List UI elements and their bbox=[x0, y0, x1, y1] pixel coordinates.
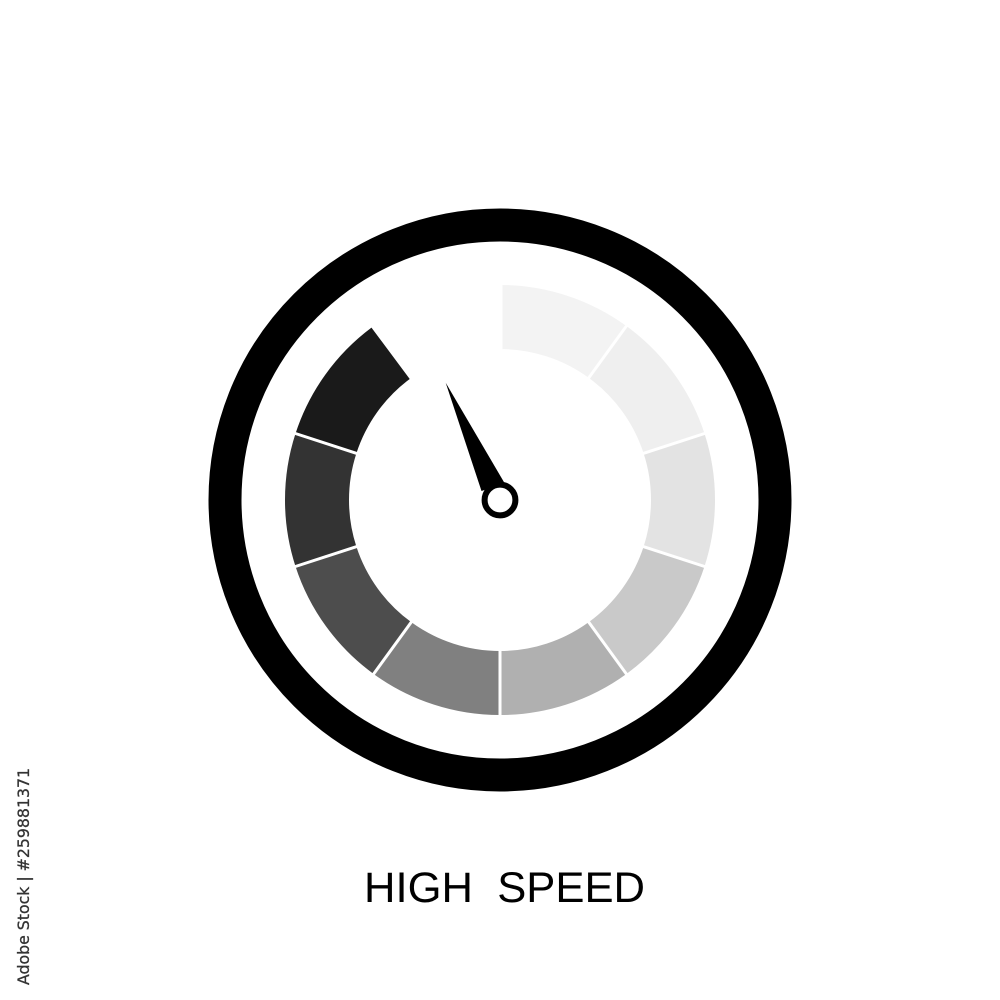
gauge outer ring bbox=[225, 225, 775, 775]
segment 6 bbox=[392, 648, 500, 683]
needle hub bbox=[485, 485, 515, 515]
segment 7 bbox=[326, 557, 392, 648]
segment 1 bbox=[500, 317, 608, 352]
title: HIGH SPEED: HIGH SPEED bbox=[364, 864, 645, 912]
segment 8 bbox=[317, 443, 326, 557]
segment 5 bbox=[500, 648, 608, 683]
segment 9 bbox=[326, 353, 391, 443]
segment 4 bbox=[608, 557, 674, 648]
segment 3 bbox=[674, 443, 683, 557]
needle bbox=[446, 383, 515, 515]
side credit text: Adobe Stock | #259881371 bbox=[14, 768, 33, 985]
needle pointer bbox=[446, 383, 504, 491]
gauge segments bbox=[317, 317, 683, 683]
segment 2 bbox=[608, 352, 674, 443]
